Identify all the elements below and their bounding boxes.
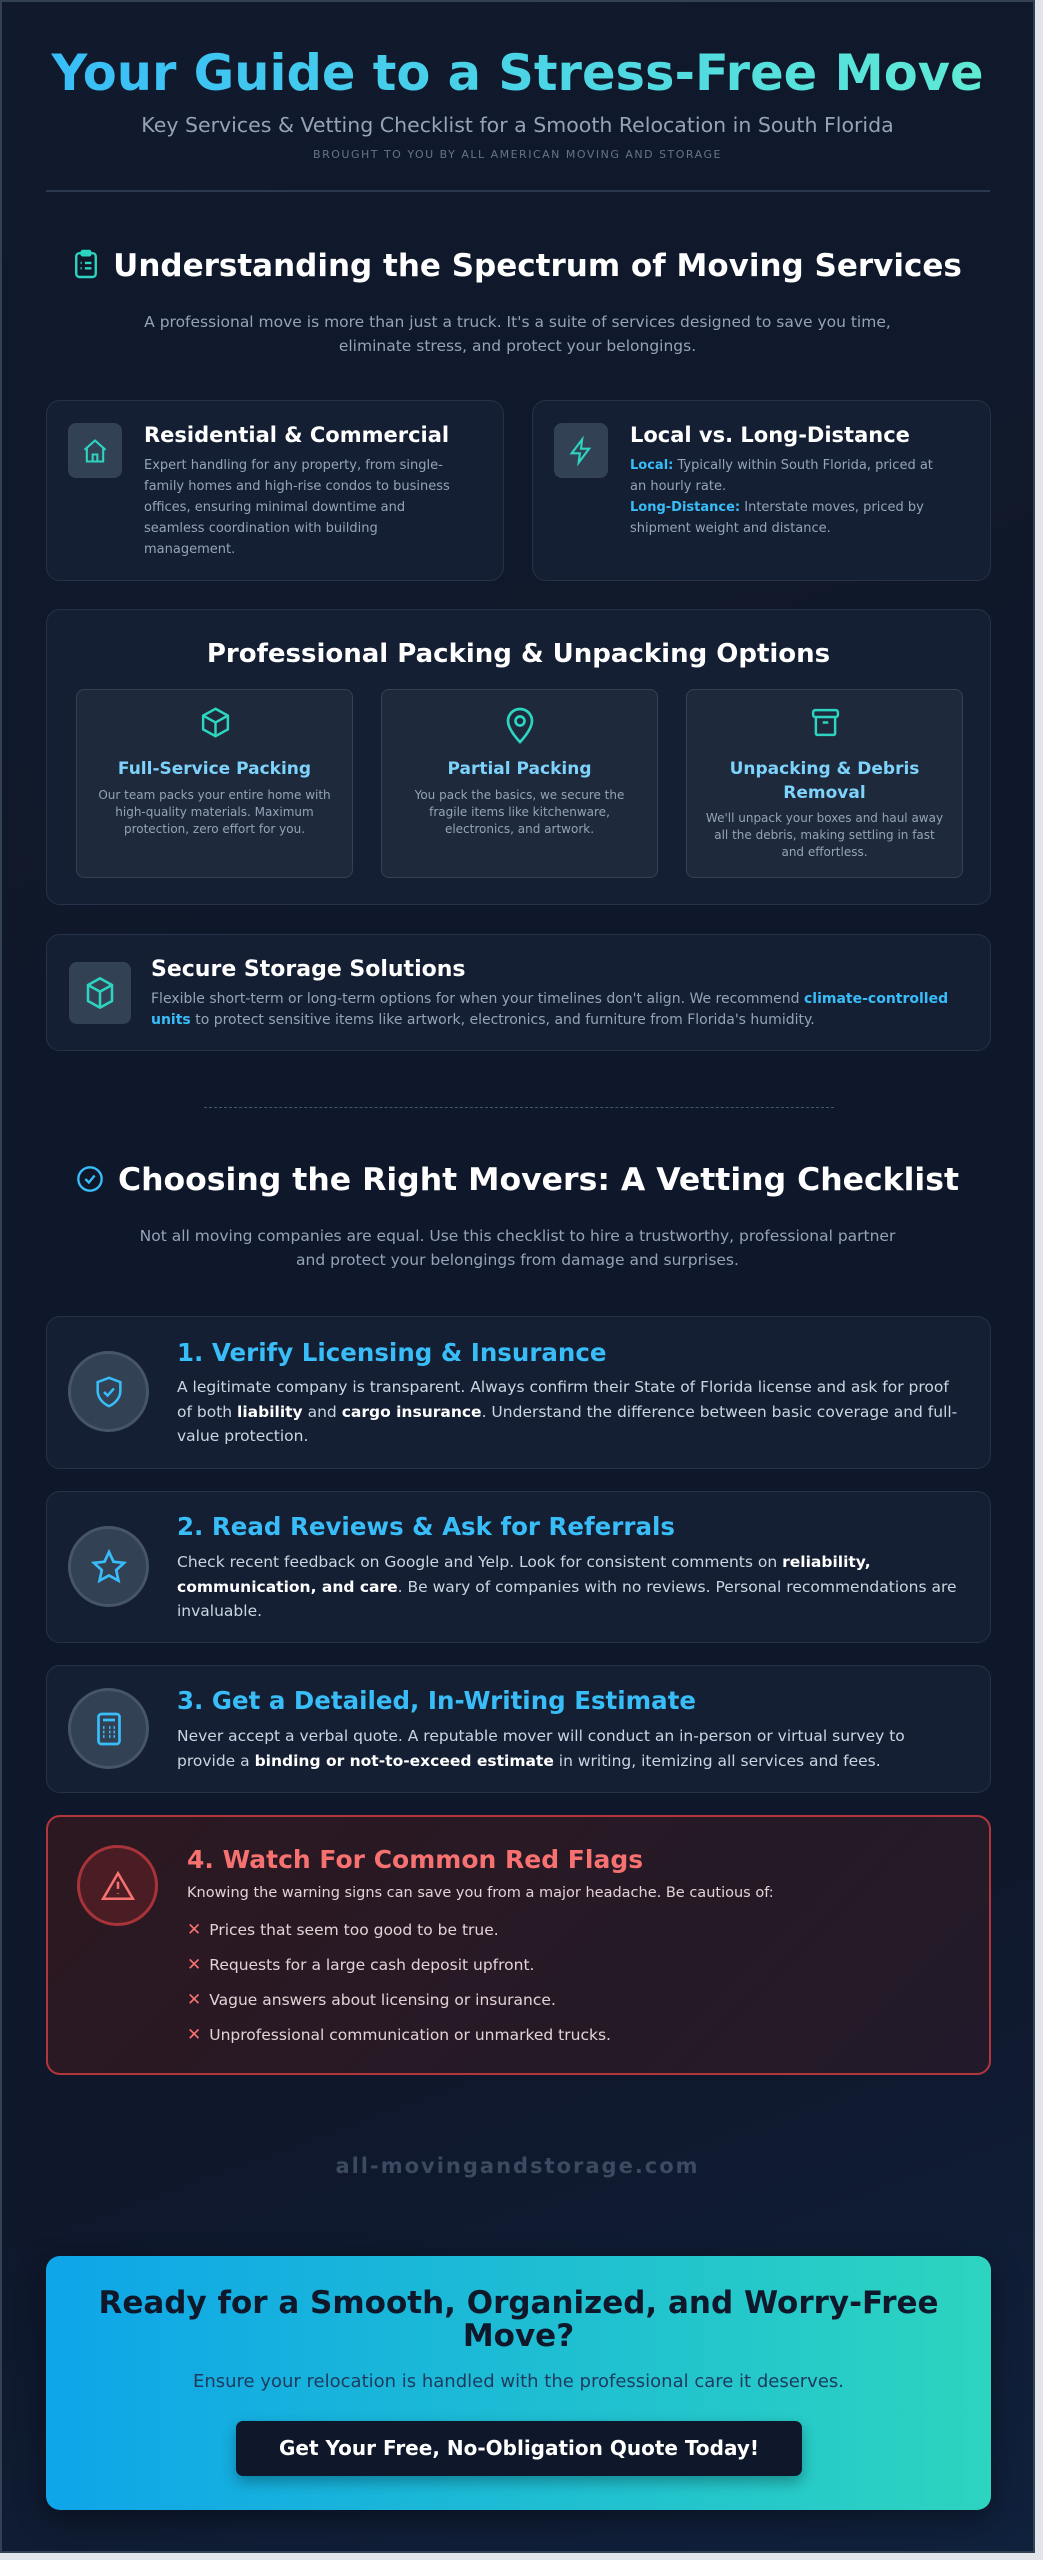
checklist 3: Never accept a verbal quote. A reputable mover will conduct an in-person or virtual survey to provide a binding or not-to-exceed estimate in writing, itemizing all services and fees. [177,1727,905,1770]
checklist 2: 2. Read Reviews & Ask for Referrals [177,1512,675,1541]
card: local vs long distance: Long-Distance: Interstate moves, priced by shipment weight and distance. [630,500,924,536]
CTA panel [46,2256,991,2510]
subcard: unpacking: We'll unpack your boxes and haul away all the debris, making settling in fast and effortless. [706,811,943,859]
CTA panel: Ready for a Smooth, Organized, and Worry-Free Move? [98,2285,939,2354]
section heading: vetting: Choosing the Right Movers: A Vetting Checklist [118,1162,959,1198]
subcard: full-service [76,689,353,878]
card: local vs long distance [532,400,991,581]
checklist 4: red flags: 4. Watch For Common Red Flags [187,1845,643,1874]
section heading: services: Understanding the Spectrum of Moving Services [113,248,962,284]
icon: box [202,707,230,738]
panel: storage [46,934,991,1051]
checklist 4: red flags: Knowing the warning signs can save you from a major headache. Be cautious of: [187,1885,774,1901]
watermark: all-movingandstorage.com [335,2154,700,2178]
panel: storage: Flexible short-term or long-term options for when your timelines don't align. We recommend climate-controlled units to protect sensitive items like artwork, electronics, and furniture from Florida's humidity. [151,991,948,1028]
panel: storage: Secure Storage Solutions [151,957,466,982]
intro text [144,313,891,355]
checklist 1 [46,1316,991,1469]
intro text vetting: Not all moving companies are equal. Use this checklist to hire a trustworthy, professional partner [140,1227,895,1245]
intro text vetting [140,1227,896,1269]
card: local vs long distance: Local vs. Long-Distance [630,423,910,447]
subtitle: Key Services & Vetting Checklist for a Smooth Relocation in South Florida [141,113,894,137]
intro text: eliminate stress, and protect your belongings. [339,337,696,355]
button: Get Your Free, No-Obligation Quote Today! [279,2436,759,2460]
subcard: unpacking [686,689,963,878]
subcard: full-service: Our team packs your entire home with high-quality materials. Maximum protection, zero effort for you. [98,788,331,836]
checklist 1: 1. Verify Licensing & Insurance [177,1338,607,1367]
card: local vs long distance: Local: Typically within South Florida, priced at an hourly rate. [630,458,933,494]
button [236,2421,802,2476]
checklist 4: red flags [46,1815,991,2075]
red flag list: ✕ Requests for a large cash deposit upfront. [187,1955,534,1975]
intro text vetting: and protect your belongings from damage and surprises. [296,1251,739,1269]
icon: star [68,1526,149,1607]
icon: cylinder [69,962,131,1024]
icon: house [68,423,122,478]
packing heading: Professional Packing & Unpacking Options [207,639,830,669]
subcard: full-service: Full-Service Packing [118,759,311,779]
subcard: partial [381,689,658,878]
subcard: partial: You pack the basics, we secure the fragile items like kitchenware, electronics, and artwork. [415,788,624,836]
checklist 3: 3. Get a Detailed, In-Writing Estimate [177,1686,696,1715]
red flag list: ✕ Vague answers about licensing or insurance. [187,1990,556,2010]
checklist 2: Check recent feedback on Google and Yelp. Look for consistent comments on reliability, communication, and care. Be wary of companies with no reviews. Personal recommendations are invaluable. [177,1553,957,1620]
card: residential [46,400,504,581]
checklist 3 [46,1665,991,1793]
red flag list [187,1920,611,2045]
card: residential: Expert handling for any property, from single-family homes and high-rise condos to business offices, ensuring minimal downtime and seamless coordination with building management. [144,458,450,557]
icon: clipboard [75,250,97,278]
icon: lightning [554,423,608,478]
red flag list: ✕ Prices that seem too good to be true. [187,1920,499,1940]
checklist 2 [46,1491,991,1643]
title: Your Guide to a Stress-Free Move [51,44,984,102]
icon: check circle [77,1166,103,1192]
panel: packing options [46,609,991,905]
subcard: unpacking: Unpacking & Debris Removal [730,759,919,803]
icon: calculator [68,1688,149,1769]
card: residential: Residential & Commercial [144,423,449,447]
icon: pin [506,708,534,744]
icon: warning [77,1845,158,1926]
icon: archive [812,708,840,736]
CTA panel: Ensure your relocation is handled with the professional care it deserves. [193,2371,844,2392]
icon: shield [68,1351,149,1432]
byline: BROUGHT TO YOU BY ALL AMERICAN MOVING AND STORAGE [313,148,722,161]
red flag list: ✕ Unprofessional communication or unmarked trucks. [187,2025,611,2045]
subcard: partial: Partial Packing [448,759,592,779]
checklist 1: A legitimate company is transparent. Always confirm their State of Florida license and ask for proof of both liability and cargo insurance. Understand the difference between basic coverage and full-value protection. [177,1378,957,1445]
intro text: A professional move is more than just a truck. It's a suite of services designed to save you time, [144,313,891,331]
